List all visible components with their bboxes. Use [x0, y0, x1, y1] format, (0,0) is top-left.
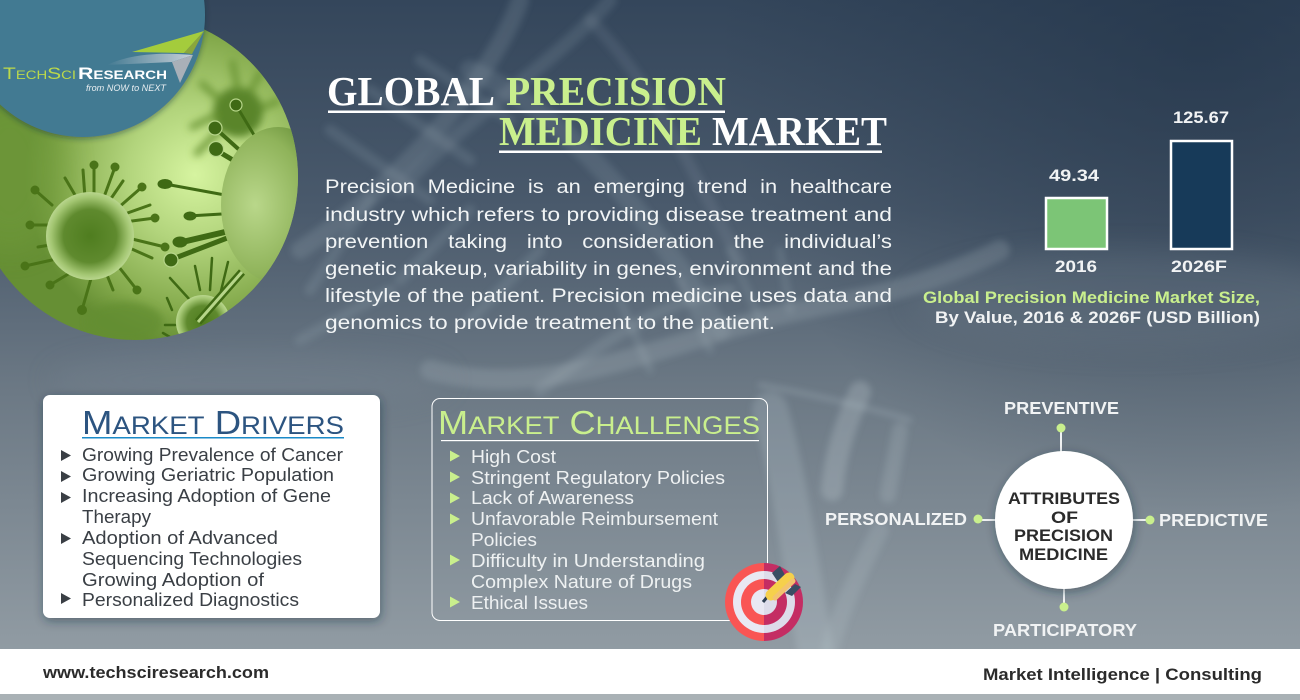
challenges list	[450, 446, 725, 613]
title: GLOBAL	[327, 68, 495, 114]
description paragraph	[325, 176, 892, 334]
logo name: Research	[78, 64, 167, 83]
challenges list: Stringent Regulatory Policies	[471, 467, 725, 488]
chart caption	[923, 288, 1260, 327]
challenges list: Ethical Issues	[471, 592, 588, 613]
bar 2026F: 125.67	[1173, 108, 1229, 127]
drivers list: Personalized Diagnostics	[82, 589, 299, 610]
drivers list: Increasing Adoption of Gene	[82, 485, 331, 506]
challenges list: Difficulty in Understanding	[471, 550, 705, 571]
challenges list: Unfavorable Reimbursement	[471, 508, 718, 529]
attributes diagram	[825, 398, 1268, 640]
blurred virus	[190, 60, 280, 155]
description paragraph: genetic makeup, variability in genes, environment and the	[325, 258, 892, 280]
challenges heading: Market Challenges	[438, 403, 760, 442]
bar 2016: 2016	[1055, 257, 1097, 276]
challenges list: Policies	[471, 529, 537, 550]
chart caption: By Value, 2016 & 2026F (USD Billion)	[935, 308, 1260, 327]
footer bar	[0, 649, 1300, 700]
drivers list: Growing Adoption of	[82, 569, 265, 590]
center circle: PRECISION	[1014, 526, 1113, 545]
attribute labels: PREDICTIVE	[1159, 510, 1268, 530]
footer bar: www.techsciresearch.com	[42, 663, 269, 682]
bar 2026F: 2026F	[1171, 257, 1227, 276]
bar 2016: 49.34	[1049, 166, 1100, 185]
drivers list: Sequencing Technologies	[82, 548, 302, 569]
description paragraph: industry which refers to providing disease treatment and	[325, 204, 892, 226]
logo name: from NOW to NEXT	[86, 83, 167, 94]
attribute labels	[825, 398, 1268, 640]
lower virus	[163, 258, 242, 349]
description paragraph: genomics to provide treatment to the patient.	[325, 312, 775, 334]
bar 2016	[1046, 166, 1107, 276]
center circle: ATTRIBUTES	[1008, 489, 1120, 508]
center circle: MEDICINE	[1019, 545, 1108, 564]
drivers list: Growing Geriatric Population	[82, 464, 334, 485]
connector stems	[982, 432, 1146, 603]
footer bar: Market Intelligence | Consulting	[983, 665, 1262, 684]
panel: market challenges	[432, 398, 768, 620]
left virus	[22, 162, 168, 314]
drivers heading: Market Drivers	[82, 403, 344, 442]
drivers list: Adoption of Advanced	[82, 527, 278, 548]
logo name: TechSci	[3, 64, 76, 83]
center circle: OF	[1051, 508, 1078, 527]
description paragraph: prevention taking into consideration the individual’s	[325, 231, 892, 253]
drivers list: Growing Prevalence of Cancer	[82, 444, 343, 465]
challenges list: Lack of Awareness	[471, 487, 634, 508]
chart caption: Global Precision Medicine Market Size,	[923, 288, 1260, 307]
bar 2026F	[1171, 108, 1232, 276]
logo mark	[107, 31, 204, 83]
title: MARKET	[712, 108, 887, 154]
logo circle	[0, 0, 205, 137]
challenges list: Complex Nature of Drugs	[471, 571, 692, 592]
center circle	[995, 451, 1133, 589]
drivers list: Therapy	[82, 506, 152, 527]
title: PRECISION	[506, 68, 726, 114]
large virus	[158, 98, 298, 280]
drivers list	[61, 444, 343, 610]
virus circle image	[0, 30, 298, 340]
challenges list: High Cost	[471, 446, 556, 467]
connector dots	[974, 424, 1154, 612]
panel: market drivers	[43, 395, 380, 618]
bar chart	[923, 108, 1260, 327]
title: MEDICINE	[499, 108, 702, 154]
title	[327, 68, 887, 154]
attribute labels: PARTICIPATORY	[993, 620, 1137, 640]
attribute labels: PREVENTIVE	[1004, 398, 1119, 418]
description paragraph: Precision Medicine is an emerging trend in healthcare	[325, 176, 892, 198]
description paragraph: lifestyle of the patient. Precision medicine uses data and	[325, 285, 892, 307]
logo name	[3, 64, 167, 94]
icon: target with dart	[725, 563, 803, 641]
attribute labels: PERSONALIZED	[825, 509, 967, 529]
